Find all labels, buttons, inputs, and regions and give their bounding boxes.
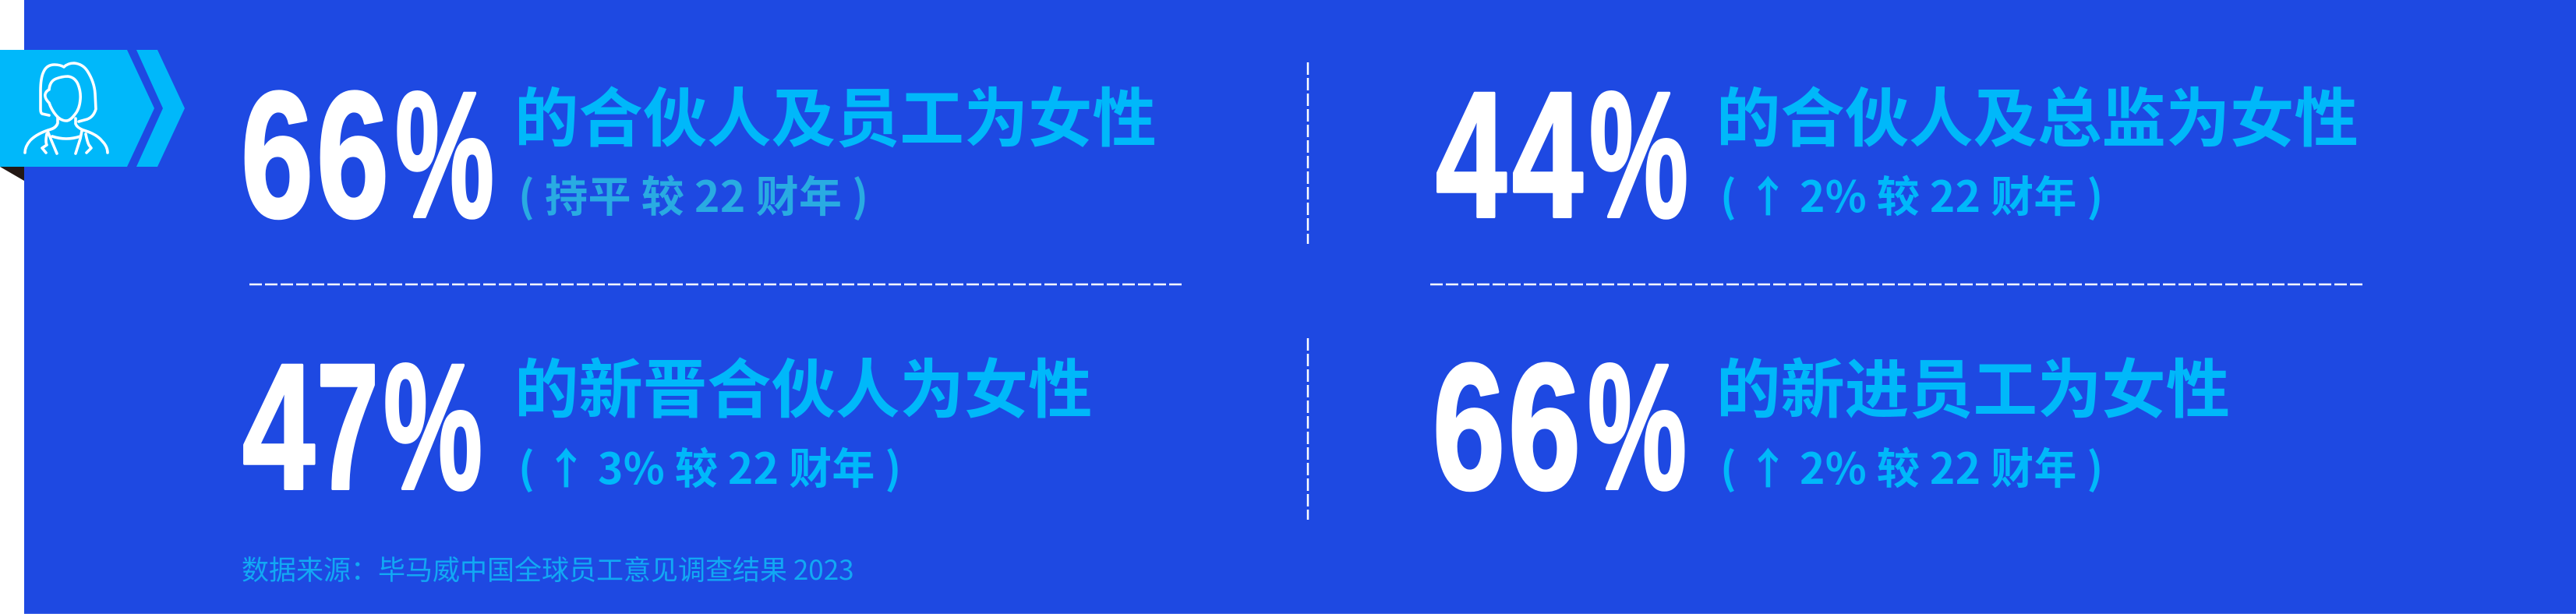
change note: ( ↑ 2% 较 22 财年 )	[1720, 162, 2104, 224]
number: 66%	[241, 55, 494, 255]
stat: 47% new partners	[242, 326, 1093, 527]
change note: ( ↑ 2% 较 22 财年 )	[1720, 434, 2104, 496]
number: 44%: 4	[1512, 55, 1583, 255]
number: 66%: 6	[241, 55, 313, 255]
number: 47%: 4	[242, 326, 315, 527]
number: 66%: 6	[1433, 326, 1505, 527]
stat: 66% new hires	[1433, 326, 2230, 527]
number: 44%: 4	[1436, 55, 1507, 255]
number: 66%	[1433, 326, 1687, 527]
change note: ( 持平 较 22 财年 )	[518, 162, 869, 224]
heading: new hires: 的新进员工为女性	[1716, 337, 2230, 431]
number: 44%	[1436, 55, 1688, 255]
heading: partners and employees: 的合伙人及员工为女性	[514, 66, 1157, 160]
number: 44%: %	[1589, 55, 1688, 255]
stat: 66% partners and employees	[241, 55, 1157, 255]
icon: ribbon banner with woman	[0, 50, 185, 181]
number: 66%: 6	[1508, 326, 1581, 527]
heading: new partners: 的新晋合伙人为女性	[514, 337, 1093, 431]
stat: 44% partners and directors	[1436, 55, 2359, 255]
number: 47%: 7	[316, 326, 379, 527]
number: 66%: %	[1588, 326, 1687, 527]
change note: ( ↑ 3% 较 22 财年 )	[518, 434, 902, 496]
number: 66%: 6	[316, 55, 389, 255]
number: 47%: %	[383, 326, 482, 527]
number: 47%	[242, 326, 482, 527]
source note: 数据来源：毕马威中国全球员工意见调查结果 2023	[242, 549, 854, 588]
heading: partners and directors: 的合伙人及总监为女性	[1716, 66, 2359, 160]
number: 66%: %	[395, 55, 494, 255]
